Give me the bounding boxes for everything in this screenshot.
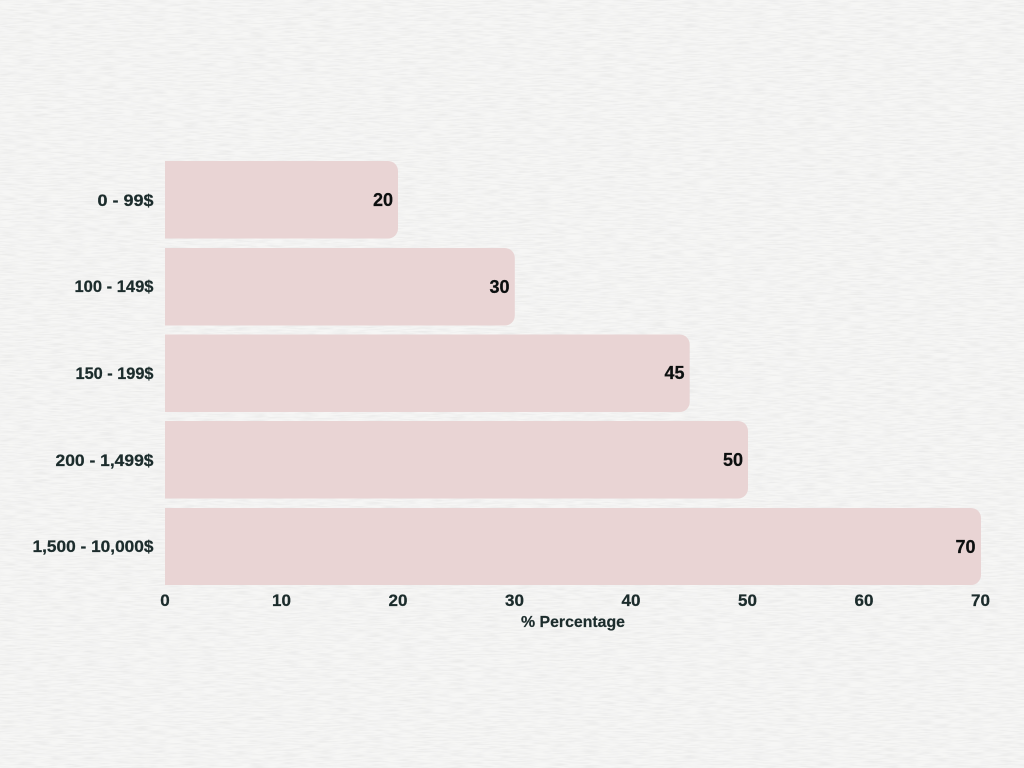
bar chart bbox=[32, 161, 981, 585]
bar: 1,500 - 10,000$: 70 bbox=[955, 537, 976, 557]
x axis tick labels: 40 bbox=[622, 591, 640, 610]
bar: 150 - 199$: 150 - 199$ bbox=[76, 364, 154, 383]
bar: 200 - 1,499$: 50 bbox=[723, 450, 743, 470]
x axis tick labels: 30 bbox=[505, 591, 524, 610]
bar: 100 - 149$: 30 bbox=[489, 277, 510, 297]
bar: 150 - 199$: 45 bbox=[664, 363, 684, 383]
x axis title: % Percentage bbox=[521, 614, 625, 631]
bar: 1,500 - 10,000$: 1,500 - 10,000$ bbox=[32, 537, 154, 556]
bar: 200 - 1,499$ bbox=[56, 421, 748, 498]
x axis tick labels: 0 bbox=[160, 591, 170, 610]
bar: 1,500 - 10,000$ bbox=[32, 508, 981, 585]
x axis tick labels: 70 bbox=[971, 591, 990, 610]
bar: 0 - 99$: 0 - 99$ bbox=[98, 191, 154, 210]
x axis tick labels: 50 bbox=[738, 591, 757, 610]
bar: 0 - 99$ bbox=[98, 161, 398, 238]
x axis tick labels: 10 bbox=[272, 591, 291, 610]
x axis tick labels: 20 bbox=[389, 591, 407, 610]
bar: 200 - 1,499$: 200 - 1,499$ bbox=[56, 451, 154, 470]
bar: 0 - 99$: 20 bbox=[373, 190, 393, 210]
bar: 100 - 149$ bbox=[74, 248, 515, 326]
bar: 150 - 199$ bbox=[76, 334, 690, 412]
x axis tick labels: 60 bbox=[855, 591, 873, 610]
bar: 100 - 149$: 100 - 149$ bbox=[74, 277, 154, 296]
x axis tick labels bbox=[160, 591, 990, 610]
